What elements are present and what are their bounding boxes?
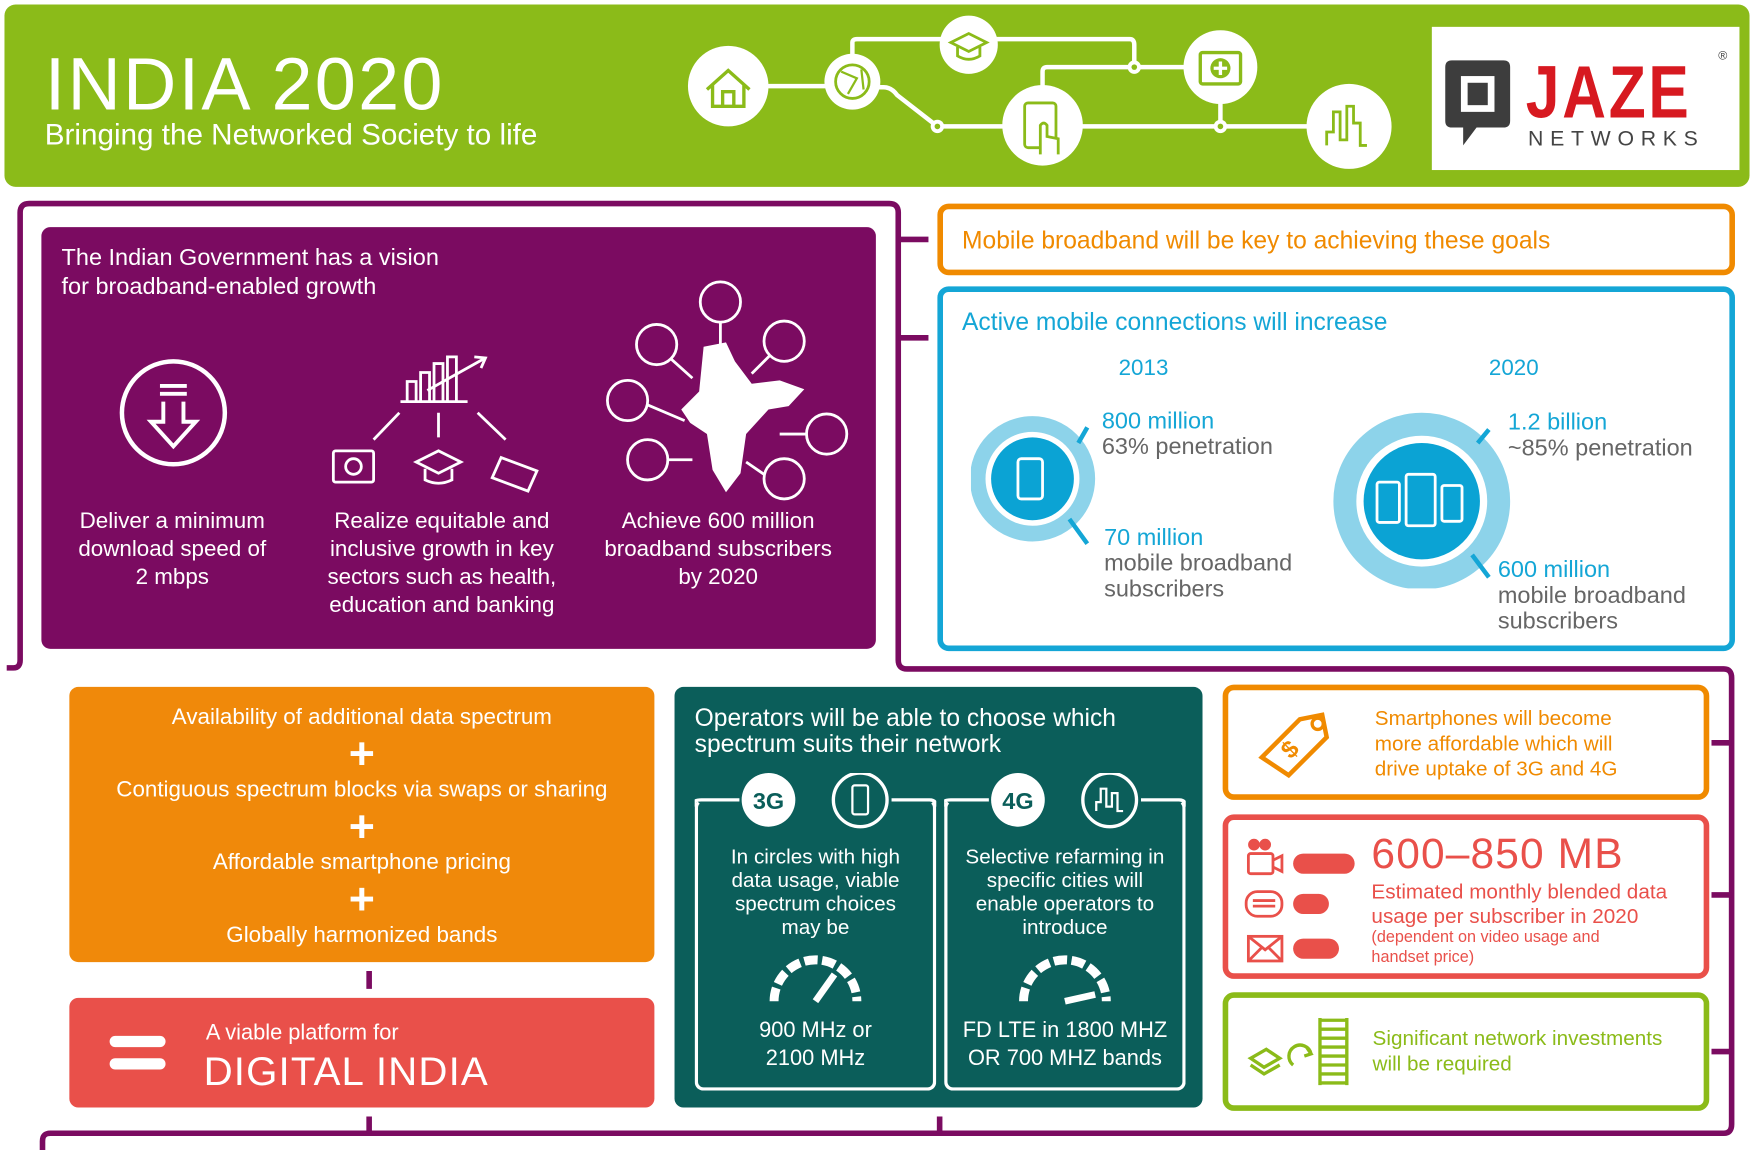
- callout: data usage 600-850 MB: (dependent on video usage and: [1371, 929, 1600, 946]
- text: download speed: 2 mbps: [136, 565, 209, 590]
- text: download speed: [78, 509, 266, 590]
- icon: download: [120, 359, 228, 466]
- panel: spectrum requirements: Affordable smartphone pricing: [213, 850, 511, 875]
- panel: spectrum requirements: Contiguous spectrum blocks via swaps or sharing: [116, 777, 607, 802]
- callout: smartphones affordable: drive uptake of 3G and 4G: [1375, 756, 1618, 780]
- logo: Jaze Networks: [1432, 27, 1739, 170]
- card: 3G: In circles with high data usage, viable spectrum choices: [731, 845, 900, 915]
- icon: equals: [110, 1036, 166, 1047]
- panel: digital india: A viable platform for: [206, 1020, 399, 1045]
- callout: data usage 600-850 MB: Estimated monthly blended data: [1371, 879, 1667, 903]
- panel: active mobile connections: [937, 286, 1735, 651]
- icon: graduation cap: [940, 16, 998, 74]
- callout: data usage 600-850 MB: usage per subscriber in 2020: [1371, 904, 1638, 927]
- card: 3G: may be: [782, 915, 849, 939]
- text: download speed: Deliver a minimum download speed of: [78, 509, 266, 562]
- icon: money stack: [1248, 1018, 1348, 1086]
- panel: spectrum requirements: +: [349, 875, 375, 924]
- callout: network investments: will be required: [1373, 1051, 1512, 1075]
- 2020 stats: subscribers: [1498, 609, 1618, 634]
- icon: media usage bars: [1244, 838, 1355, 962]
- heading: Active mobile connections will increase: [962, 308, 1387, 336]
- 2013 stats: 2013: [1119, 356, 1168, 380]
- panel: spectrum requirements: Availability of additional data spectrum: [172, 705, 552, 729]
- callout: mobile broadband key: [937, 204, 1735, 275]
- panel: spectrum requirements: [69, 687, 654, 962]
- title: INDIA 2020: [45, 43, 445, 125]
- panel: digital india: [69, 998, 654, 1108]
- 2020 stats: mobile broadband: [1498, 583, 1686, 609]
- 2020 stats: 2020: [1489, 356, 1539, 380]
- icon: city chart: [1307, 84, 1392, 169]
- panel: spectrum requirements: Globally harmonized bands: [226, 923, 497, 948]
- 2013 stats: 63% penetration: [1102, 434, 1273, 460]
- panel: spectrum requirements: +: [349, 802, 375, 851]
- icon: tablet touch: [1002, 85, 1083, 166]
- card: 4G: FD LTE in 1800 MHZ: [963, 1018, 1167, 1043]
- 2013 stats: subscribers: [1104, 576, 1224, 602]
- callout: network investments: Significant network investments: [1373, 1026, 1662, 1049]
- card: 3G: 900 MHz or: [759, 1018, 872, 1043]
- card: 4G: [944, 799, 1186, 1091]
- icon: price tag: [1258, 712, 1330, 778]
- icon: growth sectors: [332, 356, 539, 493]
- card: 4G: 4G: [1002, 788, 1034, 814]
- logo: Jaze Networks: JAZE: [1526, 50, 1692, 133]
- callout: smartphones affordable: more affordable which will: [1375, 731, 1613, 755]
- 2020 stats: [1333, 356, 1693, 634]
- 2013 stats: [970, 356, 1292, 602]
- callout: data usage 600-850 MB: 600–850 MB: [1371, 831, 1624, 878]
- card: 3G: 3G: [753, 788, 784, 814]
- 2013 stats: mobile broadband: [1104, 550, 1292, 576]
- card: 4G: Selective refarming in specific cities will enable operators to introduce: [965, 845, 1164, 939]
- logo: Jaze Networks: ®: [1718, 49, 1727, 63]
- callout: smartphones affordable: Smartphones will become: [1375, 706, 1612, 729]
- card: 4G: OR 700 MHZ bands: [968, 1046, 1162, 1071]
- text: inclusive growth: Realize equitable and inclusive growth in key sectors such as health, education and banking: [327, 509, 556, 618]
- callout: data usage 600-850 MB: [1223, 814, 1709, 979]
- 2013 stats: 70 million: [1104, 525, 1203, 550]
- logo: Jaze Networks: NETWORKS: [1528, 128, 1705, 151]
- callout: smartphones affordable: [1223, 685, 1709, 800]
- header band: [4, 4, 1750, 187]
- text: 600 million subscribers: Achieve 600 million broadband subscribers: [604, 509, 832, 562]
- icon: home: [688, 46, 768, 126]
- callout: network investments: [1223, 992, 1709, 1111]
- text: 600 million subscribers: [604, 509, 832, 590]
- 2020 stats: 600 million: [1498, 557, 1610, 583]
- panel: digital india: DIGITAL INDIA: [204, 1048, 489, 1094]
- subtitle: Bringing the Networked Society to life: [45, 117, 537, 151]
- panel: operators spectrum choice: Operators will be able to choose which: [695, 704, 1116, 732]
- icon: India map with subscribers: [606, 280, 848, 500]
- panel: operators spectrum choice: [675, 687, 1203, 1108]
- icon: globe: [824, 54, 880, 110]
- 2020 stats: ~85% penetration: [1508, 435, 1693, 461]
- header network icons: [688, 16, 1392, 169]
- 2020 stats: 1.2 billion: [1508, 409, 1607, 435]
- 2013 stats: 800 million: [1102, 408, 1214, 434]
- panel: government vision: [41, 227, 876, 649]
- heading: for broadband-enabled growth: [62, 274, 376, 300]
- panel: operators spectrum choice: spectrum suits their network: [695, 729, 1001, 757]
- icon: medical kit: [1184, 30, 1257, 104]
- panel: spectrum requirements: +: [349, 729, 375, 779]
- card: 3G: 2100 MHz: [766, 1046, 865, 1071]
- callout: data usage 600-850 MB: handset price): [1371, 949, 1474, 967]
- callout: mobile broadband key: Mobile broadband will be key to achieving these goals: [962, 226, 1550, 254]
- card: 3G: [695, 799, 936, 1091]
- heading: The Indian Government has a vision: [62, 245, 439, 271]
- heading: [62, 245, 439, 300]
- icon: price tag: $: [1276, 735, 1305, 764]
- text: 600 million subscribers: by 2020: [678, 565, 758, 590]
